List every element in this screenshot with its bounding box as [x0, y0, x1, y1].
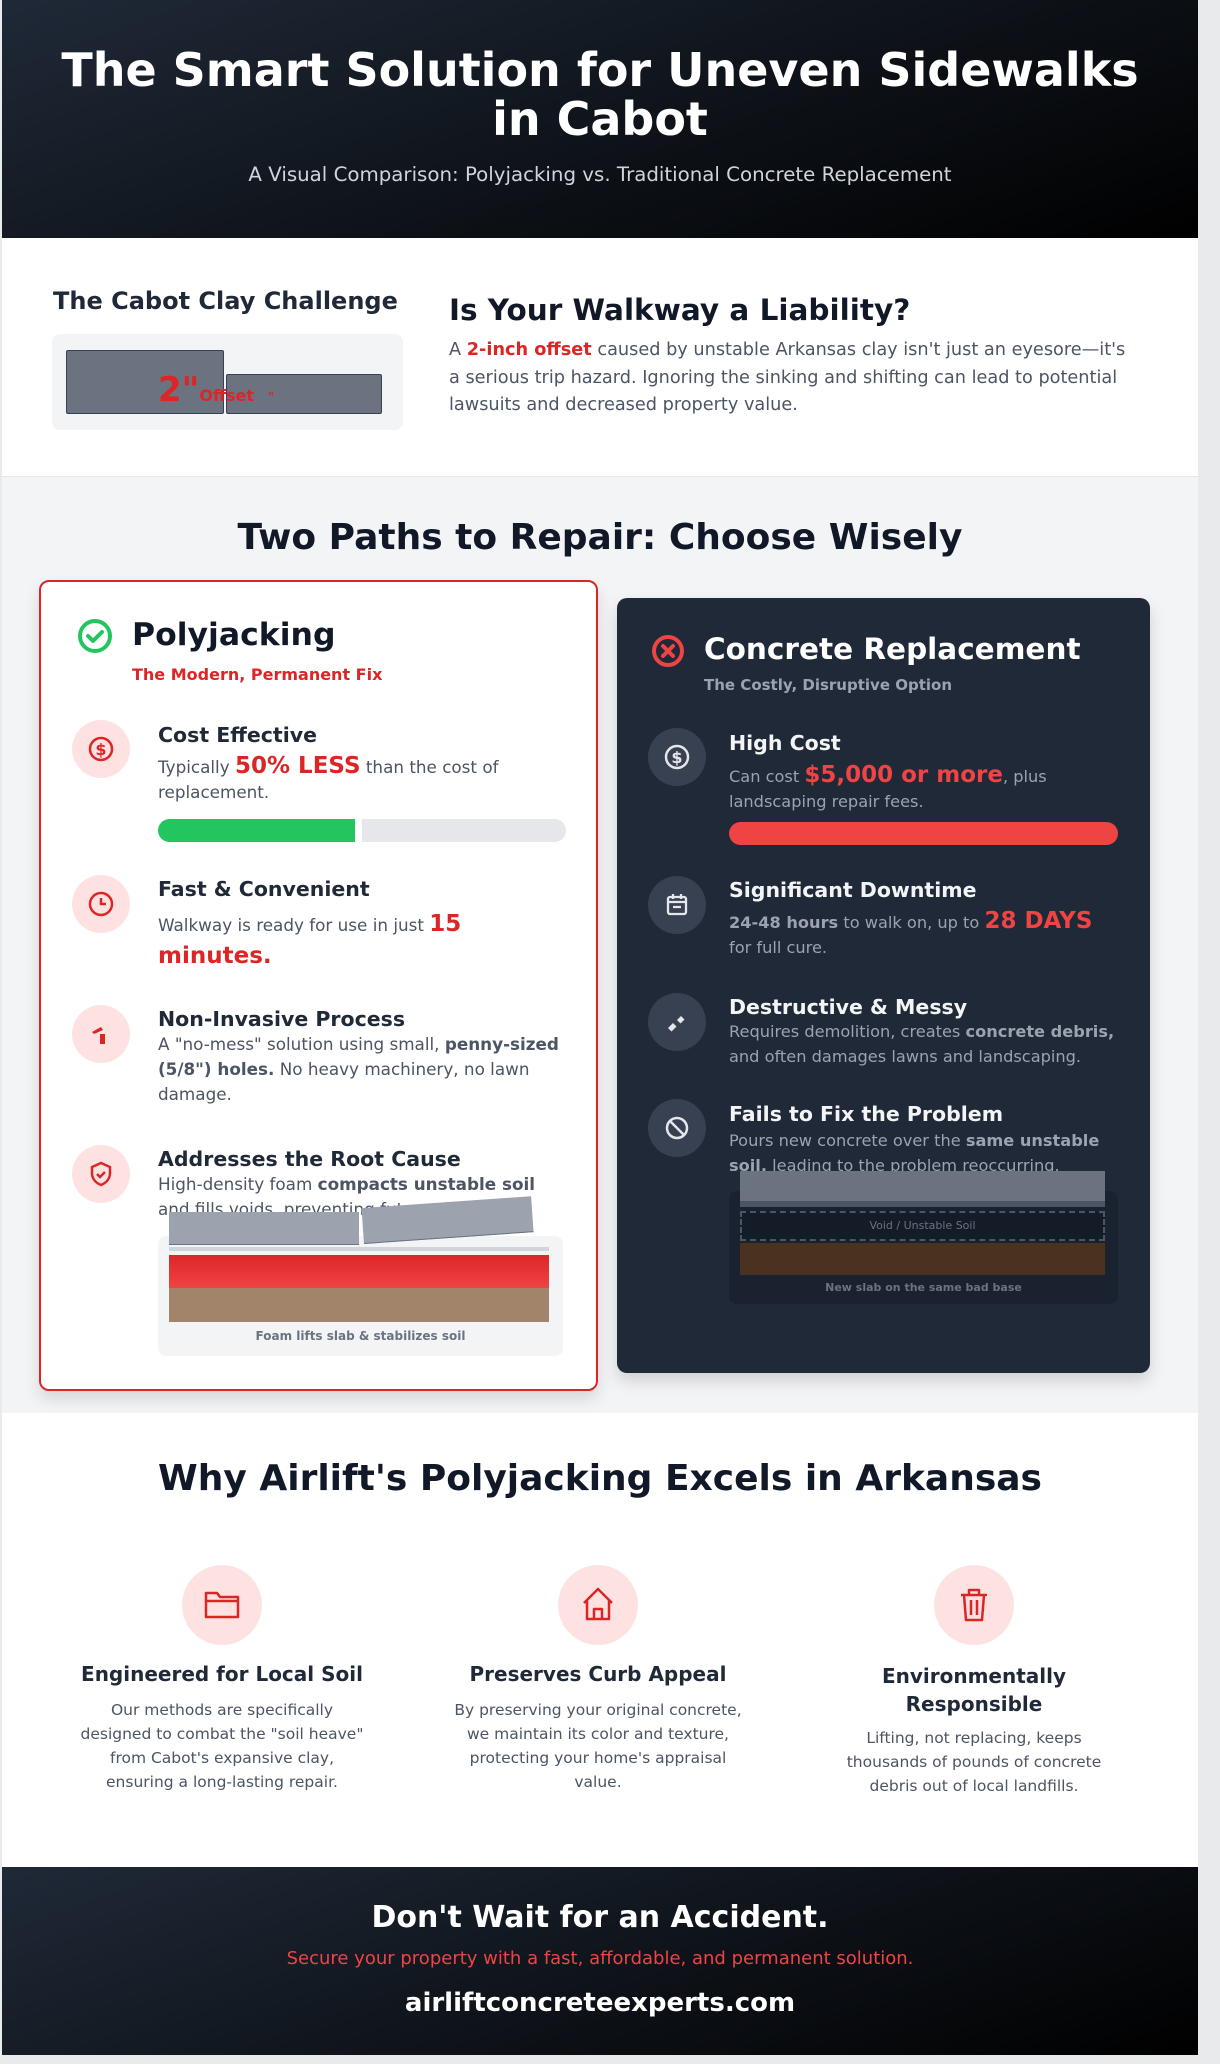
title	[61, 43, 1139, 146]
item: destructive: Destructive & Messy	[729, 995, 967, 1019]
foam diagram: Foam lifts slab & stabilizes soil	[256, 1329, 465, 1343]
feature: local soil: Engineered for Local Soil	[81, 1662, 363, 1686]
item: cost: Typically 50% LESS than the cost of replacement.	[158, 753, 499, 802]
title: The Smart Solution for Uneven Sidewalks	[61, 43, 1139, 97]
offset diagram: 2"Offset "	[158, 370, 274, 410]
feature: local soil: Our methods are specifically designed to combat the "soil heave" from Cabot's expansive clay, ensuring a long-lasting repair.	[81, 1701, 363, 1791]
title: in Cabot	[492, 92, 708, 146]
header	[2, 0, 1198, 238]
heading: cabot clay: The Cabot Clay Challenge	[53, 287, 398, 315]
bad base diagram	[729, 1191, 1118, 1304]
item: fast: Walkway is ready for use in just 15 minutes.	[158, 911, 461, 969]
footer url: airliftconcreteexperts.com	[405, 1988, 795, 2018]
section: two paths	[2, 477, 1198, 1413]
item: non-invasive	[72, 1005, 559, 1104]
item: cost: $	[95, 740, 107, 759]
foam diagram	[158, 1236, 563, 1356]
item: destructive: Requires demolition, creates concrete debris, and often damages lawns and landscaping.	[729, 1022, 1114, 1066]
subtitle: The Costly, Disruptive Option	[704, 676, 952, 694]
subtitle: The Modern, Permanent Fix	[132, 665, 382, 684]
item: fails: Pours new concrete over the same unstable soil, leading to the problem reoccurring.	[729, 1131, 1099, 1175]
item: high cost	[648, 728, 1118, 845]
bad base diagram: New slab on the same bad base	[825, 1281, 1022, 1294]
feature: curb appeal: By preserving your original concrete, we maintain its color and texture, protecting your home's appraisal value.	[454, 1701, 742, 1791]
feature: curb appeal: Preserves Curb Appeal	[470, 1662, 726, 1686]
item: root cause	[72, 1145, 535, 1219]
item: fast: Fast & Convenient	[158, 877, 370, 901]
item: cost: Cost Effective	[158, 723, 317, 747]
title: concrete: Concrete Replacement	[704, 632, 1081, 666]
item: root cause: Addresses the Root Cause	[158, 1147, 461, 1171]
item: downtime: 24-48 hours to walk on, up to 28 DAYS for full cure.	[729, 908, 1092, 957]
item: fast	[72, 875, 461, 969]
item: high cost: $	[671, 748, 683, 767]
panel: concrete replacement	[617, 598, 1150, 1373]
item: fails	[648, 1099, 1099, 1175]
item: fails: Fails to Fix the Problem	[729, 1102, 1003, 1126]
feature: local soil	[81, 1565, 363, 1791]
feature: environment: Environmentally	[882, 1664, 1066, 1688]
panel: polyjacking	[39, 580, 598, 1391]
offset diagram	[52, 334, 403, 430]
item: downtime: Significant Downtime	[729, 878, 977, 902]
feature: environment	[847, 1565, 1101, 1795]
title: polyjacking: Polyjacking	[132, 617, 336, 653]
footer	[2, 1867, 1198, 2055]
heading: why airlift: Why Airlift's Polyjacking Excels in Arkansas	[158, 1458, 1042, 1499]
item: non-invasive: A "no-mess" solution using small, penny-sized (5/8") holes. No heavy machinery, no lawn damage.	[158, 1034, 559, 1104]
icon: x	[652, 635, 684, 667]
feature: environment: Lifting, not replacing, keeps thousands of pounds of concrete debris out of local landfills.	[847, 1729, 1101, 1795]
heading: two paths: Two Paths to Repair: Choose Wisely	[238, 517, 962, 558]
bad base diagram: Void / Unstable Soil	[869, 1219, 976, 1232]
feature: curb appeal	[454, 1565, 742, 1791]
icon: check	[78, 619, 112, 653]
section: clay challenge	[2, 238, 1198, 477]
item: high cost: Can cost $5,000 or more, plus landscaping repair fees.	[729, 762, 1047, 811]
item: downtime	[648, 876, 1092, 957]
heading: liability: Is Your Walkway a Liability?	[449, 293, 910, 327]
item: cost	[72, 720, 566, 842]
feature: environment: Responsible	[906, 1692, 1042, 1716]
item: destructive	[648, 993, 1114, 1066]
paragraph: A 2-inch offset caused by unstable Arkansas clay isn't just an eyesore—it's a serious trip hazard. Ignoring the sinking and shifting can lead to potential lawsuits and decreased property value.	[449, 340, 1125, 415]
item: root cause: High-density foam compacts unstable soil and fills voids, preventing future sinking.	[158, 1174, 535, 1219]
subtitle: A Visual Comparison: Polyjacking vs. Traditional Concrete Replacement	[248, 163, 952, 186]
section: why airlift	[2, 1413, 1198, 1867]
footer tagline: Secure your property with a fast, affordable, and permanent solution.	[287, 1948, 913, 1969]
item: high cost: High Cost	[729, 731, 841, 755]
item: non-invasive: Non-Invasive Process	[158, 1007, 405, 1031]
footer heading: Don't Wait for an Accident.	[371, 1900, 829, 1935]
